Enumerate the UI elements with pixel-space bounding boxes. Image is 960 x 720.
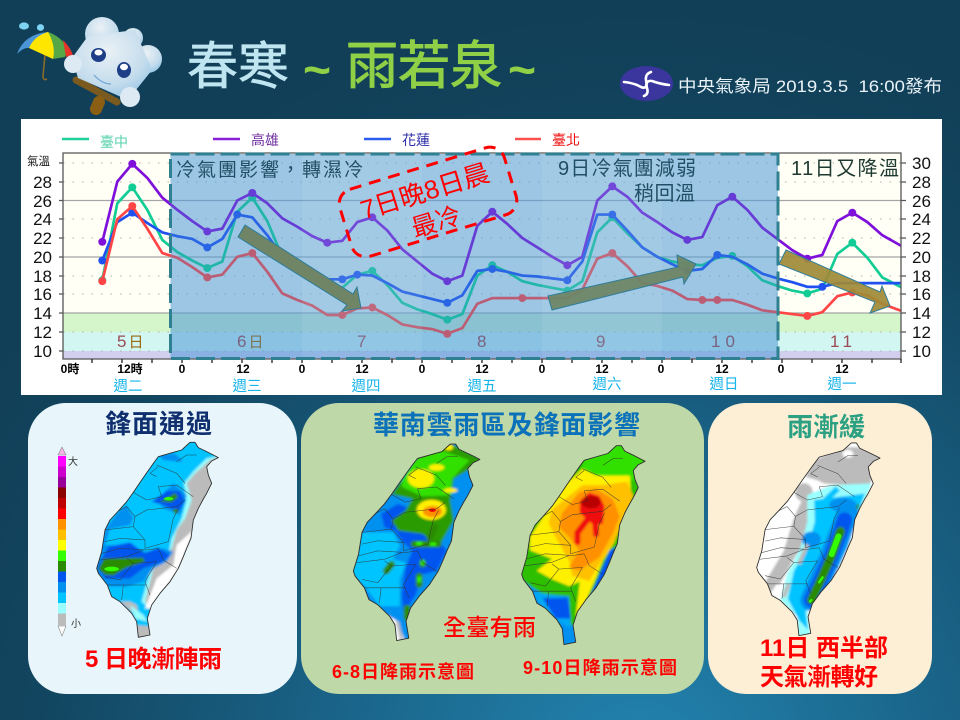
right temperature axis labels: 26: [912, 192, 931, 211]
caption 9-10: 9-10日降雨示意圖: [523, 657, 677, 678]
arrow: temperature rising 9-10: [548, 255, 696, 310]
icon: mascot collar and stem: [76, 80, 117, 109]
icon: water drops: [19, 22, 44, 31]
plot background bands: [63, 153, 901, 359]
callout: cold air mass overlay: [170, 154, 778, 358]
caption: 5 日晚漸陣雨: [85, 646, 222, 673]
left temperature axis labels: 28: [33, 173, 52, 192]
hour labels: 0: [539, 362, 546, 376]
day number labels: 6日: [237, 332, 263, 351]
line: Hualien: [98, 209, 902, 307]
caption: [760, 635, 888, 691]
legend: 高雄: [251, 132, 279, 148]
caption: 11日 西半部: [760, 635, 888, 662]
axes and ticks: [59, 153, 906, 363]
right temperature axis labels: 20: [912, 248, 931, 267]
weekday labels: 週五: [468, 378, 496, 395]
day number labels: 7: [357, 332, 366, 351]
left temperature axis labels: 24: [33, 210, 52, 229]
icon: bureau logo: [620, 66, 673, 101]
weekday labels: 週三: [232, 378, 262, 395]
hour labels: 0: [419, 362, 426, 376]
panel: rain easing: [708, 403, 932, 694]
chart annotations: 11日又降溫: [791, 157, 899, 180]
hour labels: 0: [658, 362, 665, 376]
day number labels: 8: [477, 332, 486, 351]
chart annotations: 稍回溫: [634, 182, 695, 205]
left temperature axis labels: [27, 154, 52, 361]
callout: coldest night: [336, 143, 521, 262]
hour labels: 12時: [117, 361, 143, 376]
legend: [62, 132, 580, 150]
chart annotations: [176, 157, 899, 205]
left temperature axis labels: 20: [33, 248, 52, 267]
hour labels: [61, 361, 849, 376]
weekday labels: 週四: [352, 378, 380, 395]
day number labels: 5日: [117, 332, 143, 351]
heading: 雨漸緩: [787, 412, 865, 442]
right temperature axis labels: 16: [912, 285, 931, 304]
line chart: temperature series: [98, 160, 902, 338]
legend: rainfall colour bar: [58, 447, 81, 636]
hour labels: 0: [299, 362, 306, 376]
callout: coldest night: 7日晚8日晨: [357, 158, 493, 225]
hour labels: 12: [475, 362, 489, 376]
right temperature axis labels: 28: [912, 173, 931, 192]
right temperature axis labels: 30: [912, 154, 931, 173]
hour labels: 0: [179, 362, 186, 376]
left temperature axis labels: 26: [33, 192, 52, 211]
legend: rainfall colour bar: 小: [71, 618, 81, 630]
weekday labels: 週六: [592, 376, 622, 393]
left temperature axis labels: 12: [33, 323, 52, 342]
hour labels: 12: [355, 362, 369, 376]
day number labels: 10: [711, 332, 735, 351]
legend: 臺北: [552, 132, 580, 148]
title: ~: [508, 44, 536, 97]
heading: 華南雲雨區及鋒面影響: [373, 410, 640, 440]
right temperature axis labels: 24: [912, 210, 931, 229]
right temperature axis labels: 10: [912, 342, 931, 361]
hour labels: 12: [595, 362, 609, 376]
day number labels: 11: [830, 332, 852, 351]
weekday labels: [114, 376, 856, 395]
left temperature axis labels: 氣溫: [27, 154, 50, 168]
hour labels: 0: [778, 362, 785, 376]
left temperature axis labels: 14: [33, 304, 52, 323]
panel: temperature chart: [21, 119, 942, 395]
hour labels: 12: [236, 362, 250, 376]
title: [187, 38, 536, 97]
weekday labels: 週二: [114, 378, 142, 395]
legend: rainfall colour bar: 大: [68, 455, 78, 468]
day number labels: 9: [596, 332, 605, 351]
hour labels: 12: [715, 362, 729, 376]
callout: rain everywhere: 全臺有雨: [443, 614, 536, 640]
line: Taichung: [98, 183, 902, 324]
hour labels: 12: [835, 362, 849, 376]
icon: umbrella: [17, 32, 73, 80]
heading: 鋒面通過: [105, 409, 212, 439]
cold air mass underlay: [170, 154, 778, 358]
caption: 天氣漸轉好: [760, 664, 878, 691]
title: ~: [303, 44, 331, 97]
map: rainfall day 11: [753, 439, 885, 640]
panel: south china rain: [301, 403, 704, 694]
publish date text: 中央氣象局 2019.3.5 16:00發布: [678, 77, 942, 96]
grid lines: [63, 163, 901, 351]
chart annotations: 9日冷氣團減弱: [558, 157, 696, 180]
arrow: temperature falling 11: [779, 250, 890, 313]
right temperature axis labels: 12: [912, 323, 931, 342]
map: rainfall 6-8: [350, 440, 485, 645]
icon: mascot face: [91, 48, 131, 84]
callout: coldest night: 最冷: [408, 202, 464, 243]
caption 6-8: 6-8日降雨示意圖: [332, 661, 474, 682]
left temperature axis labels: 10: [33, 342, 52, 361]
chart annotations: 冷氣團影響，轉濕冷: [176, 159, 363, 181]
legend: 花蓮: [402, 132, 430, 148]
legend: 臺中: [100, 134, 128, 150]
line: Taipei: [98, 202, 902, 338]
title: 春寒: [187, 38, 289, 95]
left temperature axis labels: 16: [33, 285, 52, 304]
weekday labels: 週日: [710, 376, 738, 393]
publisher: central weather bureau: [620, 66, 942, 101]
right temperature axis labels: 22: [912, 229, 931, 248]
arrow: temperature falling 6-7: [238, 225, 361, 311]
left temperature axis labels: 22: [33, 229, 52, 248]
day number labels: [117, 332, 852, 351]
left temperature axis labels: 18: [33, 267, 52, 286]
weekday labels: 週一: [828, 376, 856, 393]
icon: cloud mascot with umbrella: [17, 17, 162, 109]
right temperature axis labels: 14: [912, 304, 931, 323]
title: 雨若泉: [346, 38, 502, 96]
hour labels: 0時: [61, 361, 79, 376]
line: Kaohsiung: [98, 160, 902, 285]
map: rainfall day 5: [93, 438, 223, 642]
map: rainfall 9-10: [518, 442, 650, 649]
icon: cloud body: [64, 17, 162, 107]
panel: front passing: [28, 403, 297, 694]
right temperature axis labels: 18: [912, 267, 931, 286]
right temperature axis labels: [912, 154, 931, 361]
